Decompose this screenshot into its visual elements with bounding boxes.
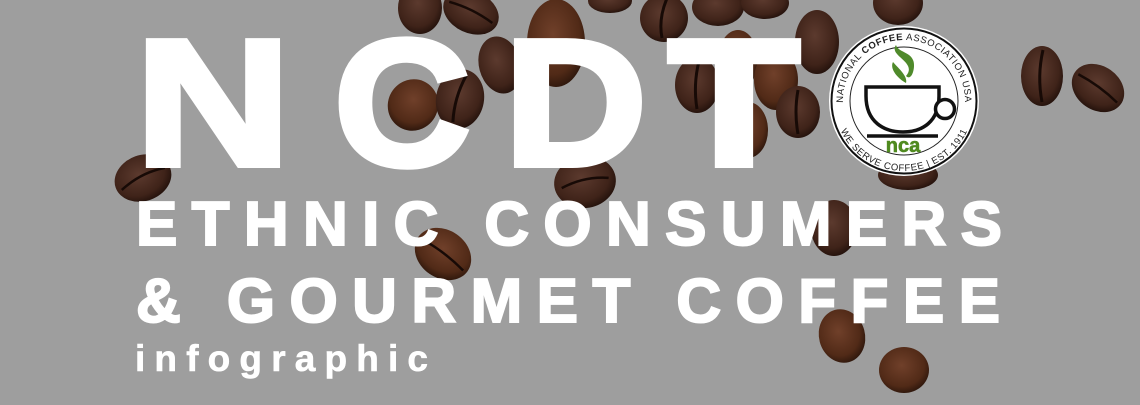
icon: coffee cup [866,87,939,132]
subheading: infographic: infographic [135,338,428,379]
title: NCDT: N [135,3,291,204]
title: NCDT: T [668,3,800,204]
icon: steam [892,45,914,83]
title: NCDT [135,3,800,204]
title: NCDT: C [334,3,470,204]
logo ring text top: NATIONAL COFFEE ASSOCIATION USA [836,34,972,102]
logo nca wordmark: nca [886,135,921,157]
heading: ethnic consumers: ETHNIC CONSUMERS [136,190,1002,259]
heading: gourmet coffee: & GOURMET COFFEE [136,267,1000,336]
logo: National Coffee Association [829,26,979,176]
logo ring text bottom: WE SERVE COFFEE | EST. 1911 [842,128,967,172]
title: NCDT: D [504,3,647,204]
